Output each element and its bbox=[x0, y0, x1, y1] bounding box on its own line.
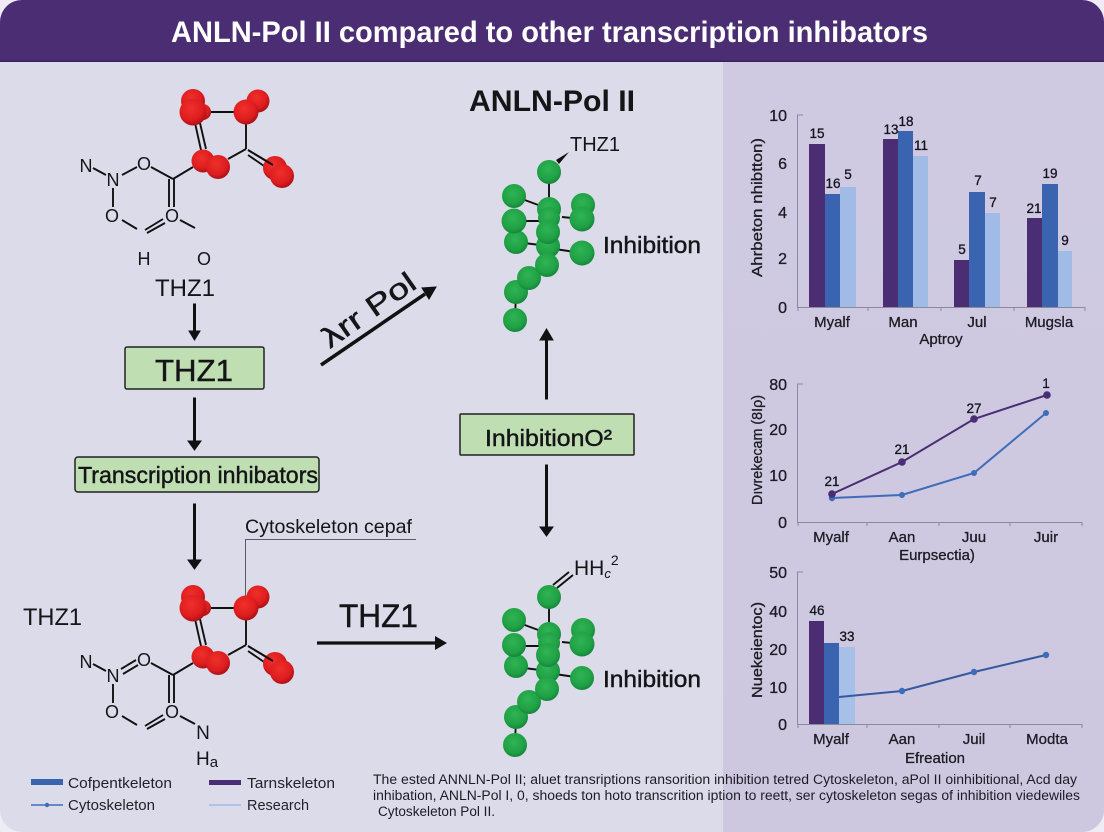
caption text: inhibation, ANLN-Pol I, 0, shoeds ton hoto transcrition iption to reett, ser cytoskeleton segas of inhibition viedewiles bbox=[373, 788, 1080, 803]
molecule: THZ1 top: O bbox=[137, 154, 151, 174]
y axis ticks: 10 bbox=[769, 108, 787, 125]
line chart: middle bbox=[750, 376, 1082, 564]
y axis ticks: 80 bbox=[769, 377, 787, 394]
label: Inhibition bottom: Inhibition bbox=[603, 666, 701, 692]
heading: ANLN-Pol II: ANLN-Pol II bbox=[469, 85, 635, 118]
y axis ticks bbox=[769, 108, 787, 317]
y axis ticks: 0 bbox=[778, 300, 787, 317]
x axis labels: Myalf bbox=[814, 314, 851, 331]
label: Inhibition top: Inhibition bbox=[603, 232, 701, 258]
x axis labels: Aan bbox=[889, 731, 915, 748]
label: THZ1 lower left: THZ1 bbox=[23, 604, 82, 631]
y axis ticks: 20 bbox=[769, 642, 787, 659]
value labels: 5 bbox=[958, 242, 966, 257]
label: THZ1 top right: THZ1 bbox=[570, 134, 620, 156]
molecule: THZ1 bottom: N bbox=[196, 723, 210, 744]
atom labels H and O: O bbox=[197, 249, 211, 269]
atom labels H and O: H bbox=[138, 249, 150, 269]
label: HHc2: HH bbox=[574, 557, 604, 580]
value labels: 21 bbox=[894, 442, 910, 457]
value labels: 7 bbox=[989, 195, 997, 210]
y axis ticks: 10 bbox=[769, 468, 787, 485]
title banner bbox=[0, 0, 1104, 62]
x axis labels: Juil bbox=[963, 731, 985, 748]
arrow: up to upper molecule bbox=[540, 329, 553, 399]
bars bbox=[809, 131, 1072, 307]
value labels bbox=[824, 376, 1050, 489]
box: Inhibition O2 bbox=[460, 414, 634, 455]
x axis labels: Efreation bbox=[905, 750, 965, 767]
y axis ticks: 6 bbox=[778, 156, 787, 173]
molecule: THZ1 top: N bbox=[80, 156, 92, 176]
y axis ticks: 4 bbox=[778, 205, 787, 222]
molecule: ANLN-Pol II top bbox=[502, 152, 595, 332]
y axis ticks: 0 bbox=[778, 515, 787, 532]
y axis ticks: 40 bbox=[769, 604, 787, 621]
label: HHc2: c bbox=[604, 566, 611, 581]
label: Cytoskeleton cepaf bbox=[245, 516, 416, 596]
legend bbox=[31, 776, 335, 814]
value labels: 18 bbox=[898, 114, 914, 129]
value labels: 19 bbox=[1042, 166, 1058, 181]
value labels: 15 bbox=[809, 126, 825, 141]
x axis labels: Man bbox=[888, 314, 918, 331]
x axis labels: Eurpsectia) bbox=[899, 547, 975, 564]
value labels: 1 bbox=[1042, 376, 1050, 391]
molecule: THZ1 bottom: N bbox=[80, 652, 92, 672]
arrow: transcription inhibators to lower molecule bbox=[188, 504, 201, 569]
y axis ticks bbox=[769, 377, 787, 532]
molecule: THZ1 bottom: O bbox=[137, 650, 151, 670]
molecule: THZ1 bottom: O bbox=[165, 702, 179, 722]
y axis ticks: 2 bbox=[778, 251, 787, 268]
x axis labels bbox=[813, 731, 1068, 767]
value labels bbox=[809, 114, 1069, 257]
x axis labels: Aptroy bbox=[919, 331, 963, 348]
molecule: THZ1 bottom bbox=[80, 585, 294, 771]
value labels: 5 bbox=[844, 167, 852, 182]
value labels: 11 bbox=[914, 138, 928, 153]
molecule: THZ1 top: O bbox=[165, 206, 179, 226]
box: THZ1: THZ1 bbox=[155, 353, 233, 388]
label: THZ1: THZ1 bbox=[155, 275, 215, 302]
x axis labels: Myalf bbox=[813, 731, 850, 748]
x axis labels bbox=[813, 529, 1058, 564]
diagonal arrow with label bbox=[316, 267, 436, 365]
horizontal arrow with THZ1 label: THZ1 bbox=[339, 598, 418, 634]
arrow: THZ1 box to transcription inhibators bbox=[188, 398, 201, 450]
line series bbox=[839, 652, 1049, 697]
value labels: 21 bbox=[1026, 201, 1042, 216]
label: HHc2: 2 bbox=[611, 552, 619, 568]
legend: Cofpentkeleton bbox=[68, 776, 172, 792]
value labels: 33 bbox=[839, 629, 855, 644]
molecule: THZ1 bottom: H bbox=[196, 749, 210, 770]
y axis title: Ahrbeton nhibtton) bbox=[750, 138, 766, 277]
value labels: 13 bbox=[883, 122, 899, 137]
molecule: THZ1 top bbox=[80, 89, 294, 233]
molecule: THZ1 bottom: O bbox=[105, 702, 119, 722]
molecule: THZ1 bottom: a bbox=[210, 754, 219, 771]
value labels: 16 bbox=[825, 176, 841, 191]
title: ANLN-Pol II compared to other transcription inhibators bbox=[171, 16, 928, 49]
x axis labels: Mugsla bbox=[1025, 314, 1074, 331]
box: Inhibition O2: InhibitionO² bbox=[485, 425, 612, 451]
caption text: Cytoskeleton Pol II. bbox=[378, 804, 495, 819]
molecule: THZ1 top: O bbox=[105, 206, 119, 226]
horizontal arrow with THZ1 label bbox=[317, 598, 447, 650]
value labels: 9 bbox=[1061, 233, 1069, 248]
line series: purple bbox=[828, 391, 1051, 498]
label: Cytoskeleton cepaf: Cytoskeleton cepaf bbox=[245, 516, 413, 538]
y axis ticks: 50 bbox=[769, 565, 787, 582]
box: transcription inhibators: Transcription inhibators bbox=[78, 462, 318, 488]
atom labels H and O bbox=[138, 249, 211, 269]
x axis labels: Aan bbox=[889, 529, 915, 546]
x axis labels: Modta bbox=[1026, 731, 1068, 748]
bars bbox=[809, 621, 855, 724]
box: THZ1 bbox=[125, 347, 264, 389]
arrow: down to lower molecule bbox=[540, 465, 553, 536]
line series: blue bbox=[829, 410, 1049, 501]
y axis title: Nuekeientoc) bbox=[750, 602, 766, 698]
legend: Cytoskeleton bbox=[68, 798, 155, 814]
y axis ticks: 10 bbox=[769, 680, 787, 697]
diagonal arrow with label: λrr Pol bbox=[316, 267, 422, 355]
x axis labels: Myalf bbox=[813, 529, 850, 546]
y axis ticks: 0 bbox=[778, 717, 787, 734]
x axis labels: Juu bbox=[962, 529, 986, 546]
combo chart: bottom bbox=[750, 565, 1082, 767]
molecule: THZ1 top: N bbox=[106, 170, 120, 190]
bar chart: top bbox=[750, 108, 1085, 348]
y axis ticks bbox=[769, 565, 787, 734]
x axis labels bbox=[814, 314, 1074, 348]
value labels bbox=[809, 603, 855, 644]
x axis labels: Jul bbox=[967, 314, 987, 331]
value labels: 7 bbox=[974, 173, 982, 188]
arrow: molecule to THZ1 box bbox=[189, 304, 200, 340]
value labels: 46 bbox=[809, 603, 825, 618]
legend: Research bbox=[247, 798, 309, 814]
molecule: ANLN-Pol II bottom bbox=[502, 572, 595, 757]
value labels: 21 bbox=[824, 474, 840, 489]
value labels: 27 bbox=[966, 401, 982, 416]
caption text: The ested ANNLN-Pol II; aluet transriptions ransorition inhibition tetred Cytoskeleton, aPol II oinhibitional, Acd day bbox=[373, 772, 1077, 787]
y axis title: Dıvrekecam (8Iρ) bbox=[750, 395, 766, 505]
legend: Tarnskeleton bbox=[247, 776, 335, 792]
y axis ticks: 20 bbox=[769, 422, 787, 439]
x axis labels: Juir bbox=[1034, 529, 1058, 546]
molecule: THZ1 bottom: N bbox=[106, 666, 120, 686]
caption text bbox=[373, 772, 1080, 819]
